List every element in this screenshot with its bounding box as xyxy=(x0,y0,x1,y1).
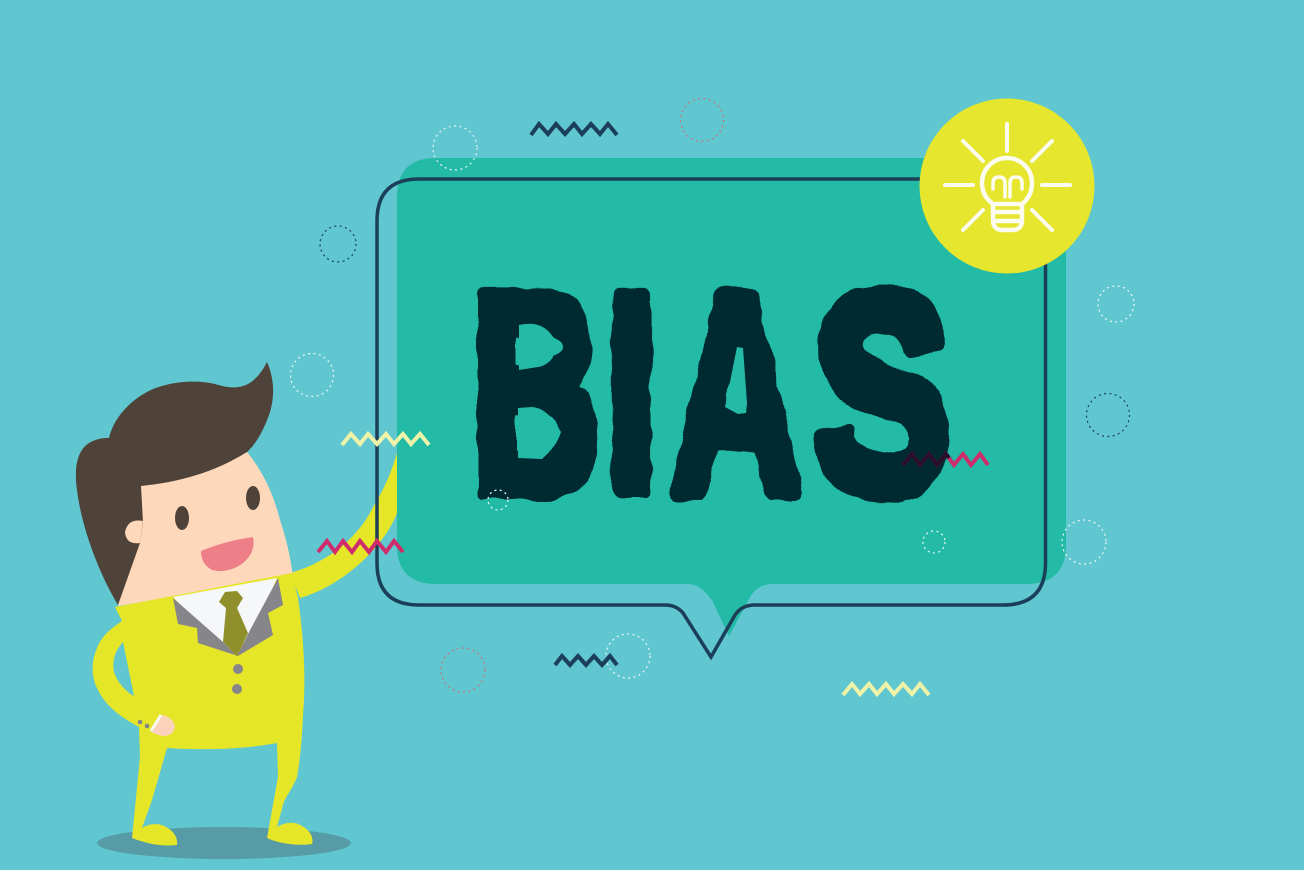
title: BIAS: A xyxy=(672,237,801,550)
title: BIAS: I xyxy=(606,237,657,550)
face xyxy=(118,452,293,606)
title: BIAS xyxy=(472,236,950,550)
raised arm xyxy=(290,453,397,598)
zigzag: navy top xyxy=(531,124,617,135)
hand xyxy=(151,715,175,736)
letter counters xyxy=(518,324,747,459)
zigzag: pale yellow left xyxy=(342,434,429,445)
ear xyxy=(125,520,143,543)
lightbulb badge xyxy=(920,98,1094,274)
eyes xyxy=(175,486,260,530)
hair xyxy=(76,362,273,605)
title: BIAS: S xyxy=(814,236,950,549)
title: BIAS: B xyxy=(472,236,599,550)
bulb rays xyxy=(945,124,1070,230)
ground shadow xyxy=(97,827,351,859)
speech bubble outline xyxy=(377,179,1046,657)
shirt xyxy=(173,578,277,650)
tie xyxy=(219,591,248,656)
badge circle xyxy=(920,98,1094,274)
lapels xyxy=(173,578,283,656)
zigzag: pale yellow lower xyxy=(843,684,929,695)
dotted circles xyxy=(290,98,1134,692)
character xyxy=(76,362,397,846)
zigzag: pink left xyxy=(318,541,403,552)
buttons xyxy=(138,664,243,728)
zigzag: navy lower xyxy=(555,656,617,665)
zigzag: pink over letter xyxy=(903,454,949,465)
arm gap xyxy=(113,642,134,696)
mouth xyxy=(201,537,254,571)
zigzag: pink right xyxy=(903,454,988,465)
bulb xyxy=(982,158,1032,230)
body and legs xyxy=(93,573,313,846)
speech bubble fill xyxy=(397,158,1066,636)
